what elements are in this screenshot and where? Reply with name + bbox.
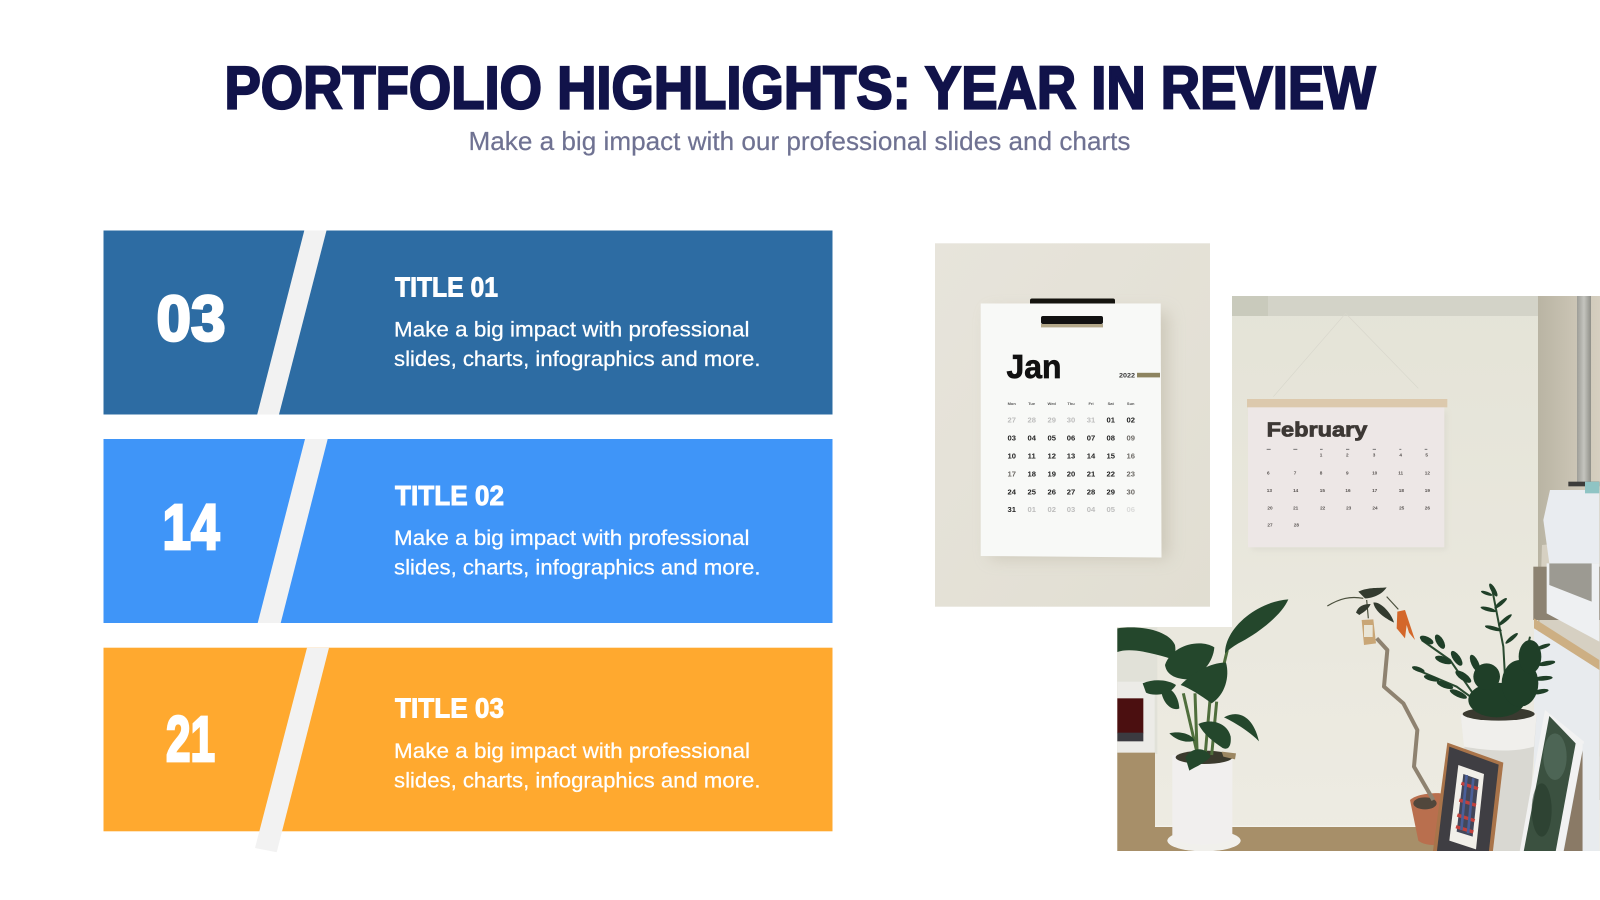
February calendar: 26 — [1425, 505, 1430, 510]
photo: January wall calendar: 19 — [1047, 470, 1056, 479]
room background — [1110, 290, 1600, 860]
photo: January wall calendar: 2022 — [1119, 373, 1135, 380]
photo: January wall calendar: 23 — [1126, 470, 1135, 479]
divider slash 03 — [255, 648, 329, 852]
February calendar: 13 — [1267, 488, 1272, 493]
February calendar: 8 — [1320, 470, 1323, 475]
heading: title 01: TITLE 01 — [395, 272, 498, 303]
photo: January wall calendar: Thu — [1067, 401, 1075, 406]
February calendar: 9 — [1346, 470, 1349, 475]
floor, fireplace and left wall — [1117, 628, 1434, 851]
body text 02 — [394, 526, 760, 580]
photo: January wall calendar: 06 — [1067, 434, 1075, 443]
heading: title 03: TITLE 03 — [395, 692, 504, 724]
printer and shelf on right — [1533, 482, 1600, 851]
panel: item 01 — [104, 230, 832, 414]
photo: January wall calendar: 02 — [1126, 416, 1135, 425]
February calendar: 22 — [1320, 505, 1326, 510]
February calendar: 2 — [1346, 453, 1349, 458]
February calendar: 20 — [1267, 505, 1273, 510]
February calendar: 11 — [1398, 470, 1404, 475]
February calendar: 18 — [1399, 488, 1404, 493]
photo: January wall calendar: 03 — [1067, 505, 1075, 514]
photo: January wall calendar: 01 — [1106, 416, 1116, 425]
photo: January wall calendar: 14 — [1087, 452, 1096, 461]
body text 03: slides, charts, infographics and more. — [394, 768, 760, 792]
photo: January wall calendar: 08 — [1106, 434, 1115, 443]
photo: January wall calendar: 29 — [1106, 487, 1115, 496]
photo: January wall calendar: 25 — [1027, 487, 1037, 496]
photo: January wall calendar: 16 — [1126, 452, 1135, 461]
photo: January wall calendar: 05 — [1106, 505, 1116, 514]
body text 03 — [394, 739, 760, 792]
photo: January wall calendar: Tue — [1028, 401, 1036, 406]
number 21: 21 — [166, 703, 215, 775]
body text 01: Make a big impact with professional — [394, 318, 750, 342]
number 14: 14 — [162, 491, 220, 563]
body text 01 — [394, 318, 760, 371]
photo: January wall calendar: 31 — [1007, 505, 1017, 514]
photo: January wall calendar: 11 — [1028, 452, 1036, 461]
photo: January wall calendar: 12 — [1047, 452, 1056, 461]
February calendar: 14 — [1293, 488, 1299, 493]
photo: January wall calendar: Mon — [1008, 401, 1016, 406]
February calendar: 10 — [1372, 470, 1378, 475]
February calendar: 27 — [1267, 522, 1273, 527]
photo: January wall calendar: 06 — [1126, 505, 1135, 514]
photo: January wall calendar: 13 — [1067, 452, 1075, 461]
heading: title 02: TITLE 02 — [395, 480, 504, 511]
divider slash 01 — [257, 230, 326, 414]
February calendar: 23 — [1346, 505, 1352, 510]
photo: January wall calendar: 15 — [1106, 452, 1116, 461]
photo: January wall calendar: 28 — [1027, 416, 1036, 425]
February calendar: 28 — [1294, 522, 1299, 527]
panel: item 02 — [104, 439, 832, 623]
photo: January wall calendar: 04 — [1087, 505, 1096, 514]
photo: January wall calendar: Jan — [1006, 348, 1062, 385]
February calendar: 5 — [1425, 453, 1428, 458]
photo: January wall calendar: 31 — [1087, 416, 1096, 425]
photo: January wall calendar: 27 — [1007, 416, 1016, 425]
photo: January wall calendar: 30 — [1126, 487, 1135, 496]
photo: January wall calendar: Sun — [1127, 401, 1135, 406]
photo: January wall calendar: 18 — [1027, 470, 1036, 479]
February calendar: 15 — [1320, 488, 1325, 493]
body text 01: slides, charts, infographics and more. — [394, 347, 760, 371]
terracotta pot — [1410, 793, 1441, 845]
February calendar: 6 — [1267, 470, 1270, 475]
February calendar: 7 — [1294, 470, 1297, 475]
February calendar: 3 — [1373, 453, 1376, 458]
photo: January wall calendar: Fri — [1088, 401, 1094, 406]
February calendar — [1247, 313, 1447, 550]
February calendar: 16 — [1345, 488, 1351, 493]
February calendar: 17 — [1372, 488, 1378, 493]
photo: January wall calendar: 04 — [1027, 434, 1037, 443]
body text 03: Make a big impact with professional — [394, 739, 750, 763]
photo: January wall calendar: 22 — [1106, 470, 1115, 479]
February calendar: February — [1267, 419, 1368, 442]
photo: January wall calendar: 30 — [1067, 416, 1075, 425]
February calendar: 24 — [1372, 505, 1378, 510]
February calendar: 1 — [1320, 453, 1323, 458]
photo: January wall calendar: 20 — [1067, 470, 1075, 479]
photo: January wall calendar: 10 — [1007, 452, 1016, 461]
photo: January wall calendar — [935, 243, 1210, 607]
photo: room with February calendar and plants — [1110, 290, 1600, 860]
February calendar: 21 — [1293, 505, 1299, 510]
photo: January wall calendar: 24 — [1007, 487, 1017, 496]
subtitle: Make a big impact with our professional slides and charts — [468, 126, 1130, 156]
photo: January wall calendar: 09 — [1126, 434, 1135, 443]
photo: January wall calendar: 27 — [1067, 487, 1075, 496]
panel: item 03 — [104, 648, 832, 852]
photo: January wall calendar: 01 — [1027, 505, 1037, 514]
framed poster — [1433, 743, 1503, 853]
photo: January wall calendar: 03 — [1007, 434, 1016, 443]
February calendar: 12 — [1425, 470, 1430, 475]
photo: January wall calendar: Wed — [1048, 401, 1056, 406]
number 03: 03 — [156, 282, 226, 354]
title: PORTFOLIO HIGHLIGHTS: YEAR IN REVIEW — [224, 54, 1376, 122]
photo: January wall calendar: 21 — [1087, 470, 1096, 479]
green framed picture — [1519, 710, 1599, 853]
photo: January wall calendar: 02 — [1047, 505, 1056, 514]
body text 02: Make a big impact with professional — [394, 526, 750, 550]
photo: January wall calendar: 26 — [1047, 487, 1056, 496]
saucer and pot — [1167, 751, 1241, 851]
middle plant with tag — [1327, 587, 1441, 845]
February calendar: 4 — [1399, 453, 1402, 458]
photo: January wall calendar: 07 — [1087, 434, 1095, 443]
photo: January wall calendar: 17 — [1007, 470, 1016, 479]
February calendar: 19 — [1425, 488, 1430, 493]
left plant — [1117, 599, 1288, 851]
photo: January wall calendar: 05 — [1047, 434, 1057, 443]
right plant and tall pot — [1411, 582, 1556, 853]
photo: January wall calendar: Sat — [1108, 401, 1114, 406]
February calendar: 25 — [1399, 505, 1405, 510]
divider slash 02 — [258, 439, 328, 623]
photo: January wall calendar: 28 — [1087, 487, 1095, 496]
photo: January wall calendar: 29 — [1047, 416, 1056, 425]
body text 02: slides, charts, infographics and more. — [394, 556, 760, 580]
